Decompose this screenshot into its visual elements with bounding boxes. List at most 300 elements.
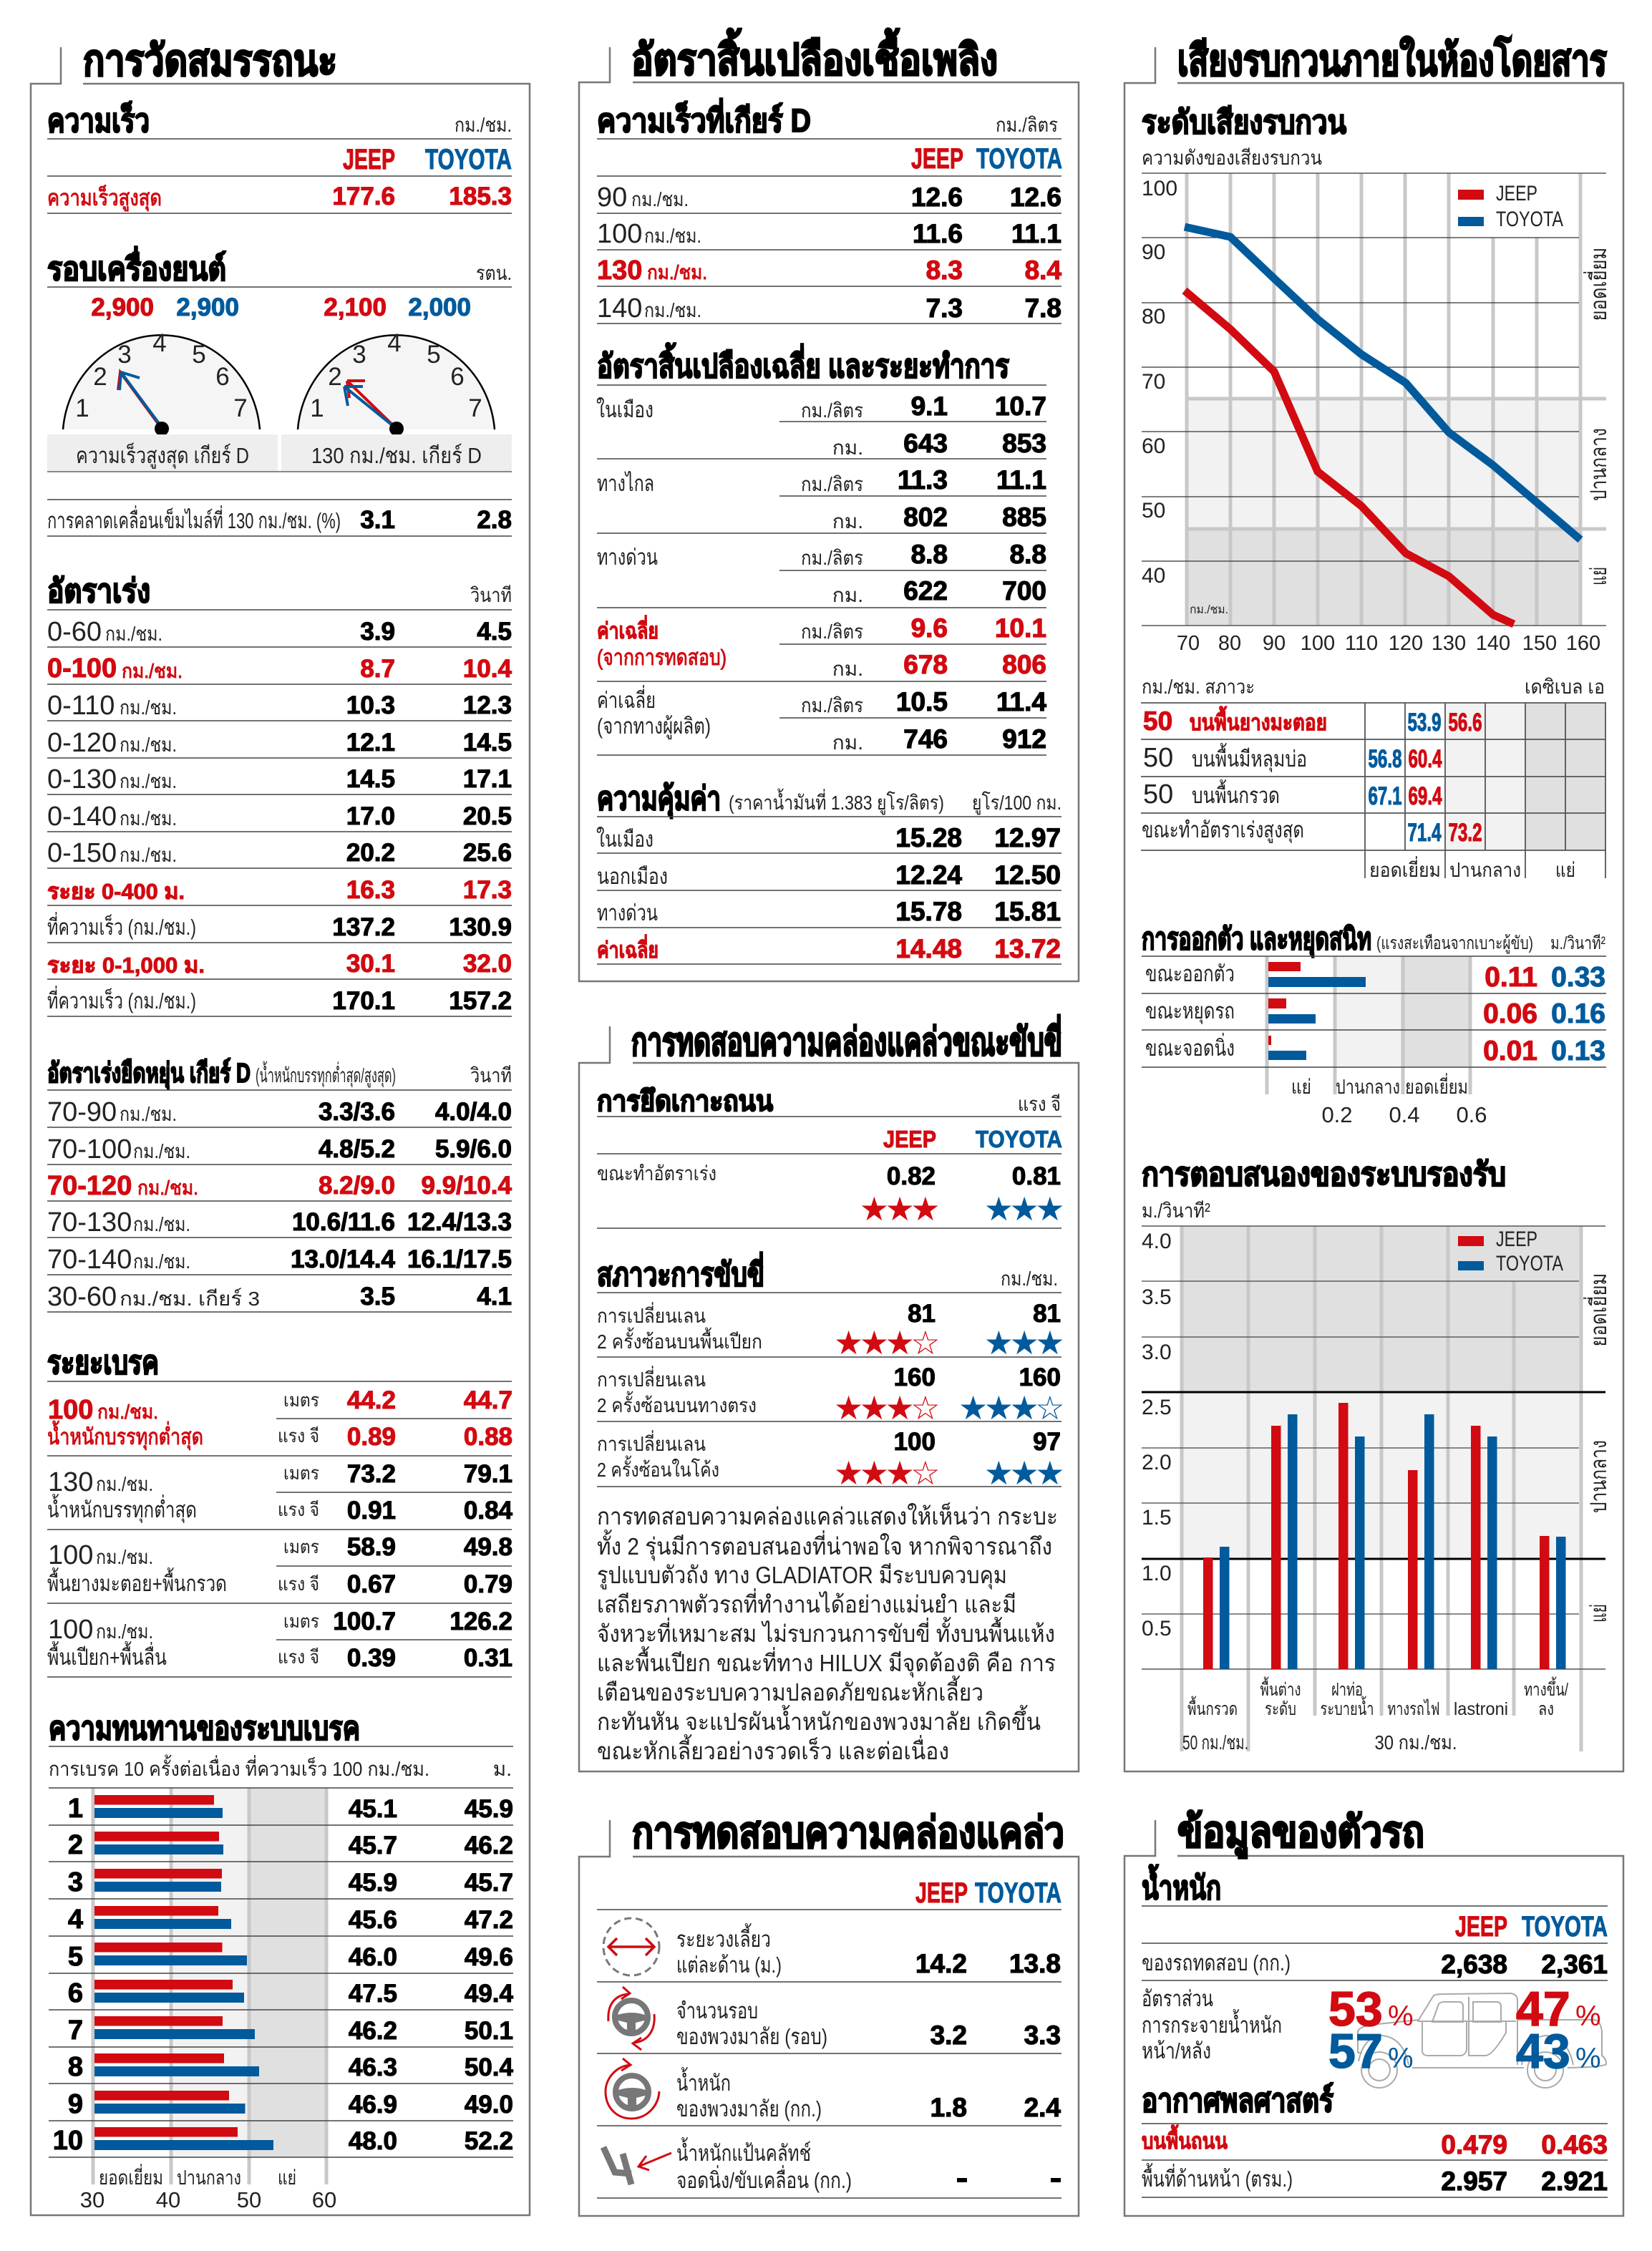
section: flexibility: 4.8/5.2 bbox=[319, 1135, 395, 1163]
section: flexibility bbox=[47, 1058, 512, 1312]
section: brake endurance heading bbox=[49, 1710, 512, 1780]
section: acceleration: 157.2 bbox=[449, 987, 512, 1015]
section: driving conditions: 160 bbox=[1019, 1363, 1061, 1391]
section: acceleration: 25.6 bbox=[463, 839, 512, 867]
section: average consumption and range: กม. bbox=[832, 437, 863, 459]
row: steering turns: จำนวนรอบ bbox=[676, 1998, 758, 2023]
section: flexibility: 9.9/10.4 bbox=[421, 1172, 512, 1200]
section: flexibility: 70-130 bbox=[47, 1207, 132, 1238]
section: top speed: กม./ชม. bbox=[455, 114, 512, 136]
section: flexibility: กม./ชม. bbox=[133, 1213, 190, 1235]
chart: brake endurance bars: 45.9 bbox=[349, 1869, 397, 1897]
section: aerodynamics: บนพื้นถนน bbox=[1142, 2124, 1228, 2154]
chart: brake endurance bars: ยอดเยี่ยม bbox=[99, 2164, 163, 2189]
panel: cabin noise bbox=[1124, 35, 1623, 1771]
section: flexibility: 30-60 bbox=[47, 1282, 117, 1312]
section: value for money: 12.50 bbox=[994, 860, 1061, 890]
chart: brake endurance bars: 40 bbox=[156, 2187, 180, 2212]
chart: noise level lines bbox=[1142, 173, 1611, 655]
section: average consumption and range bbox=[596, 342, 1046, 755]
chart: brake endurance bars: 50.4 bbox=[465, 2053, 514, 2081]
section: acceleration: วินาที bbox=[470, 584, 512, 606]
section: take-off and stopping: 0.6 bbox=[1456, 1102, 1487, 1127]
chart: noise level lines: 100 bbox=[1301, 632, 1335, 655]
weight distribution percentages: 43 bbox=[1516, 2024, 1570, 2079]
section: take-off and stopping: ปานกลาง bbox=[1336, 1076, 1400, 1098]
weight distribution percentages: % bbox=[1388, 2000, 1414, 2032]
section: value for money: ยูโร/100 กม. bbox=[972, 791, 1061, 815]
section: driving conditions: 2 ครั้งซ้อนในโค้ง bbox=[597, 1455, 719, 1481]
section: road grip: ★★★ bbox=[860, 1190, 938, 1228]
table: decibel conditions: 71.4 bbox=[1407, 819, 1442, 847]
section: acceleration: 20.5 bbox=[463, 802, 512, 830]
section: take-off and stopping: 0.11 bbox=[1485, 962, 1537, 993]
section: flexibility: กม./ชม. bbox=[120, 1103, 177, 1125]
section: flexibility: 16.1/17.5 bbox=[407, 1245, 512, 1273]
chart: brake endurance bars: 60 bbox=[312, 2187, 336, 2212]
section: acceleration: 4.5 bbox=[477, 618, 512, 646]
section: value for money: 12.97 bbox=[994, 823, 1061, 852]
section: braking distance: 100 bbox=[48, 1395, 93, 1425]
section: speed in gear D: 11.1 bbox=[1011, 219, 1061, 248]
chart: suspension response bars: ยอดเยี่ยม bbox=[1583, 1273, 1611, 1347]
section: noise level heading: ความดังของเสียงรบกวน bbox=[1142, 147, 1322, 169]
section: average consumption and range: กม. bbox=[832, 731, 863, 754]
chart: suspension response bars: 1.5 bbox=[1142, 1506, 1172, 1530]
section: braking distance: เมตร bbox=[283, 1462, 319, 1484]
section: road grip bbox=[597, 1086, 1063, 1228]
section: driving conditions: กม./ชม. bbox=[1001, 1268, 1058, 1290]
section: braking distance: 100 bbox=[48, 1540, 93, 1570]
section: acceleration: ที่ความเร็ว (กม./ชม.) bbox=[47, 986, 196, 1013]
section: take-off and stopping: ขณะจอดนิ่ง bbox=[1145, 1033, 1235, 1061]
section: driving conditions: ★★★ bbox=[984, 1454, 1063, 1492]
chart: brake endurance bars: 46.0 bbox=[349, 1943, 397, 1971]
text block: handling summary: จังหวะที่เหมาะสม ไม่รบกวนการขับขี่ ทั้งบนพื้นแห้ง bbox=[597, 1617, 1055, 1647]
panel: agility test bbox=[579, 1809, 1079, 2216]
section: average consumption and range: กม. bbox=[832, 584, 863, 606]
title: agility test: การทดสอบความคล่องแคล่ว bbox=[632, 1809, 1064, 1857]
section: value for money: ในเมือง bbox=[596, 827, 653, 852]
text block: handling summary: เตือนของระบบความปลอดภัยขณะหักเลี้ยว bbox=[597, 1676, 983, 1706]
row: speedometer error: 2.8 bbox=[477, 506, 512, 534]
section: acceleration: กม./ชม. bbox=[120, 734, 177, 756]
section: average consumption and range: ค่าเฉลี่ย bbox=[597, 685, 656, 713]
chart: brake endurance bars: 45.7 bbox=[465, 1869, 513, 1897]
text block: handling summary: เสถียรภาพตัวรถที่ทำงานได้อย่างแม่นยำ และมี bbox=[597, 1588, 1016, 1618]
section: acceleration: 12.3 bbox=[463, 691, 512, 719]
section: engine rpm heading: รตน. bbox=[476, 262, 512, 284]
section: acceleration: อัตราเร่ง bbox=[47, 573, 150, 609]
row: speedometer error: 3.1 bbox=[360, 506, 395, 534]
section: flexibility: 4.0/4.0 bbox=[435, 1098, 512, 1126]
section: acceleration: 16.3 bbox=[346, 876, 395, 904]
section: braking distance: พื้นเปียก+พื้นลื่น bbox=[47, 1641, 167, 1670]
chart: brake endurance bars: 45.9 bbox=[465, 1795, 513, 1823]
gauge captions: ความเร็วสูงสุด เกียร์ D bbox=[76, 442, 249, 470]
section: acceleration: ที่ความเร็ว (กม./ชม.) bbox=[47, 912, 196, 940]
section: driving conditions: 2 ครั้งซ้อนบนพื้นเปียก bbox=[597, 1327, 762, 1353]
section: acceleration: กม./ชม. bbox=[122, 660, 183, 682]
table: decibel conditions: 53.9 bbox=[1407, 709, 1442, 736]
row: steering turns: 3.2 bbox=[931, 2021, 967, 2050]
section: aerodynamics: 2.921 bbox=[1541, 2167, 1608, 2196]
section: take-off and stopping bbox=[1142, 922, 1606, 1127]
gauge: 130 km/h rpm: 6 bbox=[450, 363, 465, 391]
section: acceleration: 0-140 bbox=[47, 802, 117, 832]
section: average consumption and range: 11.4 bbox=[996, 687, 1046, 716]
text block: handling summary: ขณะหักเลี้ยวอย่างรวดเร็ว และต่อเนื่อง bbox=[597, 1734, 949, 1764]
section: speed in gear D: กม./ชม. bbox=[644, 299, 701, 321]
section: aerodynamics bbox=[1142, 2082, 1608, 2196]
weight distribution percentages: 53 bbox=[1328, 1982, 1383, 2036]
section: flexibility: 3.3/3.6 bbox=[319, 1098, 395, 1126]
chart: suspension response bars: พื้นกรวด bbox=[1187, 1696, 1238, 1719]
section: acceleration: 17.3 bbox=[463, 876, 512, 904]
section: average consumption and range: ทางด่วน bbox=[597, 545, 658, 570]
table: decibel conditions: ยอดเยี่ยม bbox=[1369, 856, 1441, 881]
chart: noise level lines: 100 bbox=[1142, 177, 1177, 200]
table: decibel conditions: 50 bbox=[1143, 743, 1173, 773]
section: brake endurance heading: การเบรค 10 ครั้งต่อเนื่อง ที่ความเร็ว 100 กม./ชม. bbox=[49, 1754, 429, 1780]
chart: noise level lines: 80 bbox=[1218, 632, 1241, 655]
panel: performance measurement bbox=[31, 37, 530, 2215]
section: flexibility: 12.4/13.3 bbox=[407, 1208, 512, 1236]
section: average consumption and range: กม. bbox=[832, 510, 863, 533]
legend: noise chart bbox=[1458, 182, 1563, 231]
section: weight bbox=[1142, 1864, 1608, 2063]
title: handling test: การทดสอบความคล่องแคล่วขณะขับขี่ bbox=[631, 1014, 1062, 1064]
section: speed in gear D: 140 bbox=[597, 293, 642, 324]
section: acceleration: 20.2 bbox=[346, 839, 395, 867]
section: road grip: ★★★ bbox=[984, 1190, 1063, 1228]
section: take-off and stopping: 0.01 bbox=[1483, 1036, 1537, 1066]
section: weight: 2,638 bbox=[1441, 1950, 1507, 1979]
section: average consumption and range: 10.5 bbox=[896, 687, 948, 716]
section: flexibility: กม./ชม. bbox=[137, 1177, 198, 1199]
section: flexibility: 70-140 bbox=[47, 1245, 132, 1275]
gauge: max speed rpm: 6 bbox=[215, 363, 230, 391]
section: engine rpm heading: 2,100 bbox=[324, 293, 387, 321]
section: acceleration: ระยะ 0-400 ม. bbox=[47, 879, 185, 904]
section: average consumption and range: 746 bbox=[903, 724, 948, 754]
section: average consumption and range: 8.8 bbox=[1010, 540, 1046, 569]
section: acceleration: 14.5 bbox=[346, 765, 395, 793]
section: flexibility: กม./ชม. เกียร์ 3 bbox=[120, 1288, 260, 1310]
section: driving conditions: ★★★☆ bbox=[834, 1454, 938, 1492]
section: noise level heading: ระดับเสียงรบกวน bbox=[1142, 104, 1346, 140]
section: speed in gear D: JEEP bbox=[911, 143, 963, 175]
text block: handling summary: ทั้ง 2 รุ่นมีการตอบสนองที่น่าพอใจ หากพิจารณาถึง bbox=[597, 1530, 1052, 1561]
section: top speed: TOYOTA bbox=[425, 144, 512, 175]
section: road grip: TOYOTA bbox=[976, 1126, 1062, 1152]
icon: turning circle bbox=[603, 1918, 659, 1975]
section: road grip: 0.81 bbox=[1012, 1162, 1061, 1190]
section: acceleration: 14.5 bbox=[463, 729, 512, 757]
section: value for money: (ราคาน้ำมันที่ 1.383 ยูโร/ลิตร) bbox=[729, 788, 944, 815]
chart: brake endurance bars: 7 bbox=[68, 2016, 83, 2046]
chart: suspension response bars: ทางขึ้น/ bbox=[1524, 1676, 1568, 1700]
chart: suspension response bars: ระดับ bbox=[1265, 1699, 1296, 1719]
section: value for money: ความคุ้มค่า bbox=[597, 780, 721, 819]
chart: brake endurance bars: 52.2 bbox=[465, 2127, 513, 2155]
section: acceleration: 32.0 bbox=[463, 950, 512, 978]
section: speed in gear D: ความเร็วที่เกียร์ D bbox=[597, 98, 811, 139]
chart: brake endurance bars: 10 bbox=[53, 2126, 83, 2156]
section: road grip: การยึดเกาะถนน bbox=[597, 1086, 773, 1117]
chart: suspension response bars: ทางรถไฟ bbox=[1387, 1698, 1440, 1719]
chart: suspension response bars: 4.0 bbox=[1142, 1230, 1172, 1253]
section: acceleration: 10.4 bbox=[463, 655, 512, 683]
section: acceleration: กม./ชม. bbox=[120, 770, 177, 792]
section: braking distance: ระยะเบรค bbox=[47, 1344, 159, 1381]
gauge: max speed rpm: 4 bbox=[152, 329, 167, 357]
chart: suspension response bars: 50 กม./ชม. bbox=[1182, 1731, 1248, 1754]
section: value for money: 13.72 bbox=[994, 934, 1061, 963]
panel: agility test: TOYOTA bbox=[975, 1877, 1061, 1909]
section: braking distance: 0.88 bbox=[464, 1423, 512, 1451]
weight distribution percentages: 57 bbox=[1328, 2024, 1383, 2079]
section: flexibility: 3.5 bbox=[360, 1283, 395, 1311]
chart: suspension response bars: 3.0 bbox=[1142, 1341, 1172, 1364]
section: braking distance: 0.89 bbox=[347, 1423, 396, 1451]
section: road grip: 0.82 bbox=[887, 1162, 936, 1190]
row: clutch weight bbox=[676, 2137, 1061, 2193]
gauge: 130 km/h rpm: 5 bbox=[427, 341, 441, 369]
section: average consumption and range: 622 bbox=[903, 576, 948, 606]
section: top speed: ความเร็ว bbox=[47, 101, 150, 139]
section: suspension response heading: การตอบสนองของระบบรองรับ bbox=[1142, 1156, 1506, 1192]
section: take-off and stopping: การออกตัว และหยุดสนิท bbox=[1142, 922, 1371, 958]
section: flexibility: 10.6/11.6 bbox=[292, 1208, 395, 1236]
legend: noise chart: TOYOTA bbox=[1496, 208, 1563, 231]
section: braking distance: 58.9 bbox=[347, 1533, 396, 1561]
gauge: max speed rpm: 5 bbox=[192, 341, 206, 369]
section: average consumption and range: กม./ลิตร bbox=[801, 399, 863, 422]
section: acceleration: 170.1 bbox=[332, 987, 395, 1015]
chart: suspension response bars: 2.5 bbox=[1142, 1396, 1172, 1419]
section: suspension response heading: ม./วินาที² bbox=[1142, 1200, 1210, 1222]
section: average consumption and range: 853 bbox=[1002, 429, 1046, 458]
chart: brake endurance bars: 4 bbox=[68, 1905, 83, 1935]
section: flexibility: 4.1 bbox=[477, 1283, 512, 1311]
section: weight: การกระจายน้ำหนัก bbox=[1142, 2009, 1282, 2038]
title: performance: การวัดสมรรถนะ bbox=[83, 37, 337, 84]
section: driving conditions: 100 bbox=[894, 1428, 936, 1456]
gauge: 130 km/h rpm: 2 bbox=[328, 363, 342, 391]
section: value for money: นอกเมือง bbox=[597, 864, 668, 889]
chart: suspension response bars: ปานกลาง bbox=[1586, 1440, 1611, 1513]
row: turning radius: 14.2 bbox=[915, 1949, 967, 1978]
title: vehicle data: ข้อมูลของตัวรถ bbox=[1177, 1808, 1424, 1859]
section: average consumption and range: 885 bbox=[1002, 502, 1046, 532]
chart: brake endurance bars: 8 bbox=[68, 2052, 83, 2082]
chart: noise level lines: 130 bbox=[1432, 632, 1466, 655]
icon: steering wheel turns bbox=[608, 1987, 654, 2050]
section: take-off and stopping: ขณะหยุดรถ bbox=[1145, 998, 1235, 1025]
chart: suspension response bars: ลง bbox=[1538, 1699, 1554, 1719]
section: engine rpm heading: รอบเครื่องยนต์ bbox=[47, 246, 226, 287]
section: flexibility: 5.9/6.0 bbox=[435, 1135, 512, 1163]
row: turning radius: แต่ละด้าน (ม.) bbox=[676, 1953, 782, 1978]
panel: vehicle data bbox=[1124, 1808, 1623, 2216]
section: braking distance: พื้นยางมะตอย+พื้นกรวด bbox=[47, 1567, 227, 1596]
panel: fuel consumption bbox=[579, 28, 1079, 981]
section: take-off and stopping: ยอดเยี่ยม bbox=[1405, 1073, 1468, 1098]
table: decibel conditions: บนพื้นมีหลุมบ่อ bbox=[1192, 743, 1307, 773]
section: acceleration: กม./ชม. bbox=[120, 696, 177, 719]
section: acceleration: 0-60 bbox=[47, 617, 102, 647]
section: acceleration: 130.9 bbox=[449, 913, 512, 941]
section: acceleration: 12.1 bbox=[346, 729, 395, 757]
section: average consumption and range: 678 bbox=[903, 650, 948, 679]
section: average consumption and range: 802 bbox=[903, 502, 948, 532]
section: weight: 2,361 bbox=[1541, 1950, 1608, 1979]
chart: noise level lines: 150 bbox=[1522, 632, 1557, 655]
section: driving conditions: 81 bbox=[1033, 1300, 1061, 1328]
chart: suspension response bars: 0.5 bbox=[1142, 1617, 1172, 1640]
text block: handling summary: และพื้นเปียก ขณะที่ทาง HILUX มีจุดต้องติ คือ การ bbox=[597, 1646, 1056, 1678]
chart: suspension response bars: 1.0 bbox=[1142, 1562, 1172, 1585]
section: weight: น้ำหนัก bbox=[1142, 1864, 1221, 1906]
table: decibel conditions: 56.8 bbox=[1369, 745, 1401, 773]
section: braking distance: กม./ชม. bbox=[97, 1401, 158, 1423]
section: driving conditions: ★★★☆ bbox=[958, 1389, 1063, 1427]
chart: noise level lines: 90 bbox=[1142, 240, 1165, 264]
legend: suspension chart: TOYOTA bbox=[1496, 1252, 1563, 1275]
section: acceleration: กม./ชม. bbox=[120, 844, 177, 866]
section: average consumption and range: กม./ลิตร bbox=[801, 473, 863, 495]
chart: noise level lines: 70 bbox=[1177, 632, 1200, 655]
row: turning radius bbox=[676, 1923, 1061, 1978]
section: driving conditions: 81 bbox=[908, 1300, 936, 1328]
chart: suspension response bars: lastroni bbox=[1454, 1699, 1508, 1719]
chart: brake endurance bars: 45.7 bbox=[349, 1832, 397, 1859]
section: engine rpm heading bbox=[47, 246, 512, 321]
section: aerodynamics: 0.463 bbox=[1541, 2130, 1608, 2159]
section: acceleration: 0-110 bbox=[47, 691, 115, 721]
section: acceleration: 0-100 bbox=[47, 653, 117, 684]
section: take-off and stopping: ขณะออกตัว bbox=[1145, 961, 1235, 986]
section: driving conditions: 2 ครั้งซ้อนบนทางตรง bbox=[597, 1391, 757, 1416]
section: braking distance: 0.84 bbox=[464, 1497, 513, 1525]
section: engine rpm heading: 2,000 bbox=[408, 293, 471, 321]
chart: suspension response bars: พื้นต่าง bbox=[1260, 1676, 1301, 1700]
section: flexibility: 13.0/14.4 bbox=[291, 1245, 396, 1273]
section: braking distance: กม./ชม. bbox=[96, 1620, 153, 1643]
section: average consumption and range: (จากการทดสอบ) bbox=[597, 645, 727, 670]
section: road grip: ขณะทำอัตราเร่ง bbox=[597, 1162, 716, 1185]
section: braking distance: แรง จี bbox=[278, 1573, 319, 1595]
gauge: 130 km/h rpm bbox=[298, 329, 495, 436]
section: acceleration: กม./ชม. bbox=[120, 807, 177, 830]
section: top speed: 185.3 bbox=[449, 183, 512, 210]
chart: suspension response bars bbox=[1142, 1226, 1611, 1754]
chart: brake endurance bars: 50.1 bbox=[465, 2017, 513, 2045]
table: decibel conditions bbox=[1141, 676, 1606, 881]
chart: brake endurance bars: 47.5 bbox=[349, 1980, 397, 2008]
table: decibel conditions: แย่ bbox=[1555, 859, 1575, 881]
section: braking distance: 0.31 bbox=[464, 1644, 512, 1672]
section: braking distance: 0.67 bbox=[347, 1570, 396, 1598]
chart: noise level lines: 80 bbox=[1142, 305, 1165, 329]
section: flexibility: (น้ำหนักบรรทุกต่ำสุด/สูงสุด) bbox=[256, 1061, 396, 1088]
section: take-off and stopping: 0.2 bbox=[1321, 1102, 1353, 1127]
chart: brake endurance bars bbox=[49, 1746, 514, 2212]
chart: brake endurance bars: 5 bbox=[68, 1942, 83, 1972]
section: take-off and stopping: 0.16 bbox=[1551, 998, 1605, 1029]
section: driving conditions: สภาวะการขับขี่ bbox=[597, 1252, 764, 1293]
section: engine rpm heading: 2,900 bbox=[91, 293, 154, 321]
chart: brake endurance bars: แย่ bbox=[278, 2167, 296, 2189]
section: braking distance: แรง จี bbox=[278, 1646, 319, 1668]
section: average consumption and range: 643 bbox=[903, 429, 948, 458]
chart: suspension response bars: ระบายน้ำ bbox=[1320, 1696, 1374, 1719]
chart: noise level lines: 120 bbox=[1389, 632, 1423, 655]
icon: clutch pedal bbox=[603, 2147, 671, 2184]
row: speedometer error: การคลาดเคลื่อนเข็มไมล์ที่ 130 กม./ชม. (%) bbox=[47, 505, 341, 533]
gauge: 130 km/h rpm: 1 bbox=[310, 394, 324, 422]
section: value for money: 15.28 bbox=[895, 823, 962, 852]
chart: brake endurance bars: 46.2 bbox=[465, 1832, 513, 1859]
gauge: max speed rpm: 2 bbox=[93, 363, 107, 391]
section: braking distance: 44.2 bbox=[347, 1386, 396, 1414]
section: speed in gear D: กม./ชม. bbox=[631, 188, 689, 210]
section: driving conditions: ★★★ bbox=[984, 1323, 1063, 1362]
chart: noise level lines: 110 bbox=[1345, 632, 1378, 655]
gauge: max speed rpm: 3 bbox=[117, 341, 132, 369]
section: average consumption and range: 10.7 bbox=[995, 392, 1046, 421]
section: road grip: แรง จี bbox=[1018, 1093, 1061, 1115]
weight distribution percentages: % bbox=[1575, 2043, 1601, 2074]
weight distribution percentages: % bbox=[1388, 2043, 1414, 2074]
section: speed in gear D: 12.6 bbox=[1010, 183, 1061, 212]
section: average consumption and range: กม./ลิตร bbox=[801, 547, 863, 569]
section: braking distance: 44.7 bbox=[464, 1386, 512, 1414]
row: steering weight: น้ำหนัก bbox=[676, 2067, 731, 2096]
section: engine rpm heading: 2,900 bbox=[176, 293, 239, 321]
section: acceleration: 17.0 bbox=[346, 802, 395, 830]
table: decibel conditions: กม./ชม. สภาวะ bbox=[1142, 676, 1255, 698]
icon: steering wheel weight bbox=[606, 2058, 659, 2119]
section: top speed: JEEP bbox=[343, 144, 395, 175]
chart: brake endurance bars: ปานกลาง bbox=[177, 2167, 241, 2189]
chart: suspension response bars: แย่ bbox=[1586, 1604, 1611, 1623]
table: decibel conditions: 50 bbox=[1143, 706, 1172, 736]
title: fuel consumption: อัตราสิ้นเปลืองเชื้อเพลิง bbox=[631, 28, 998, 84]
text block: handling summary bbox=[597, 1502, 1058, 1764]
section: acceleration: 30.1 bbox=[346, 950, 395, 978]
section: flexibility: กม./ชม. bbox=[133, 1250, 190, 1273]
table: decibel conditions: ปานกลาง bbox=[1449, 859, 1521, 881]
section: speed in gear D: กม./ชม. bbox=[644, 225, 701, 247]
section: acceleration: 137.2 bbox=[332, 913, 395, 941]
section: average consumption and range: กม./ลิตร bbox=[801, 694, 863, 716]
section: braking distance bbox=[47, 1344, 513, 1677]
section: average consumption and range: 9.6 bbox=[911, 613, 948, 643]
section: braking distance: 73.2 bbox=[347, 1460, 396, 1488]
section: flexibility: อัตราเร่งยืดหยุ่น เกียร์ D bbox=[47, 1058, 251, 1090]
chart: noise level lines: ยอดเยี่ยม bbox=[1583, 248, 1611, 321]
gauge: 130 km/h rpm: 4 bbox=[387, 329, 402, 357]
section: brake endurance heading: ความทนทานของระบบเบรค bbox=[49, 1710, 360, 1746]
table: decibel conditions: บนพื้นยางมะตอย bbox=[1190, 706, 1327, 735]
section: braking distance: 100.7 bbox=[333, 1608, 396, 1635]
section: average consumption and range: กม./ลิตร bbox=[801, 621, 863, 643]
chart: brake endurance bars: 48.0 bbox=[349, 2127, 397, 2155]
row: turning radius: 13.8 bbox=[1009, 1949, 1061, 1978]
section: take-off and stopping: แย่ bbox=[1291, 1076, 1311, 1098]
